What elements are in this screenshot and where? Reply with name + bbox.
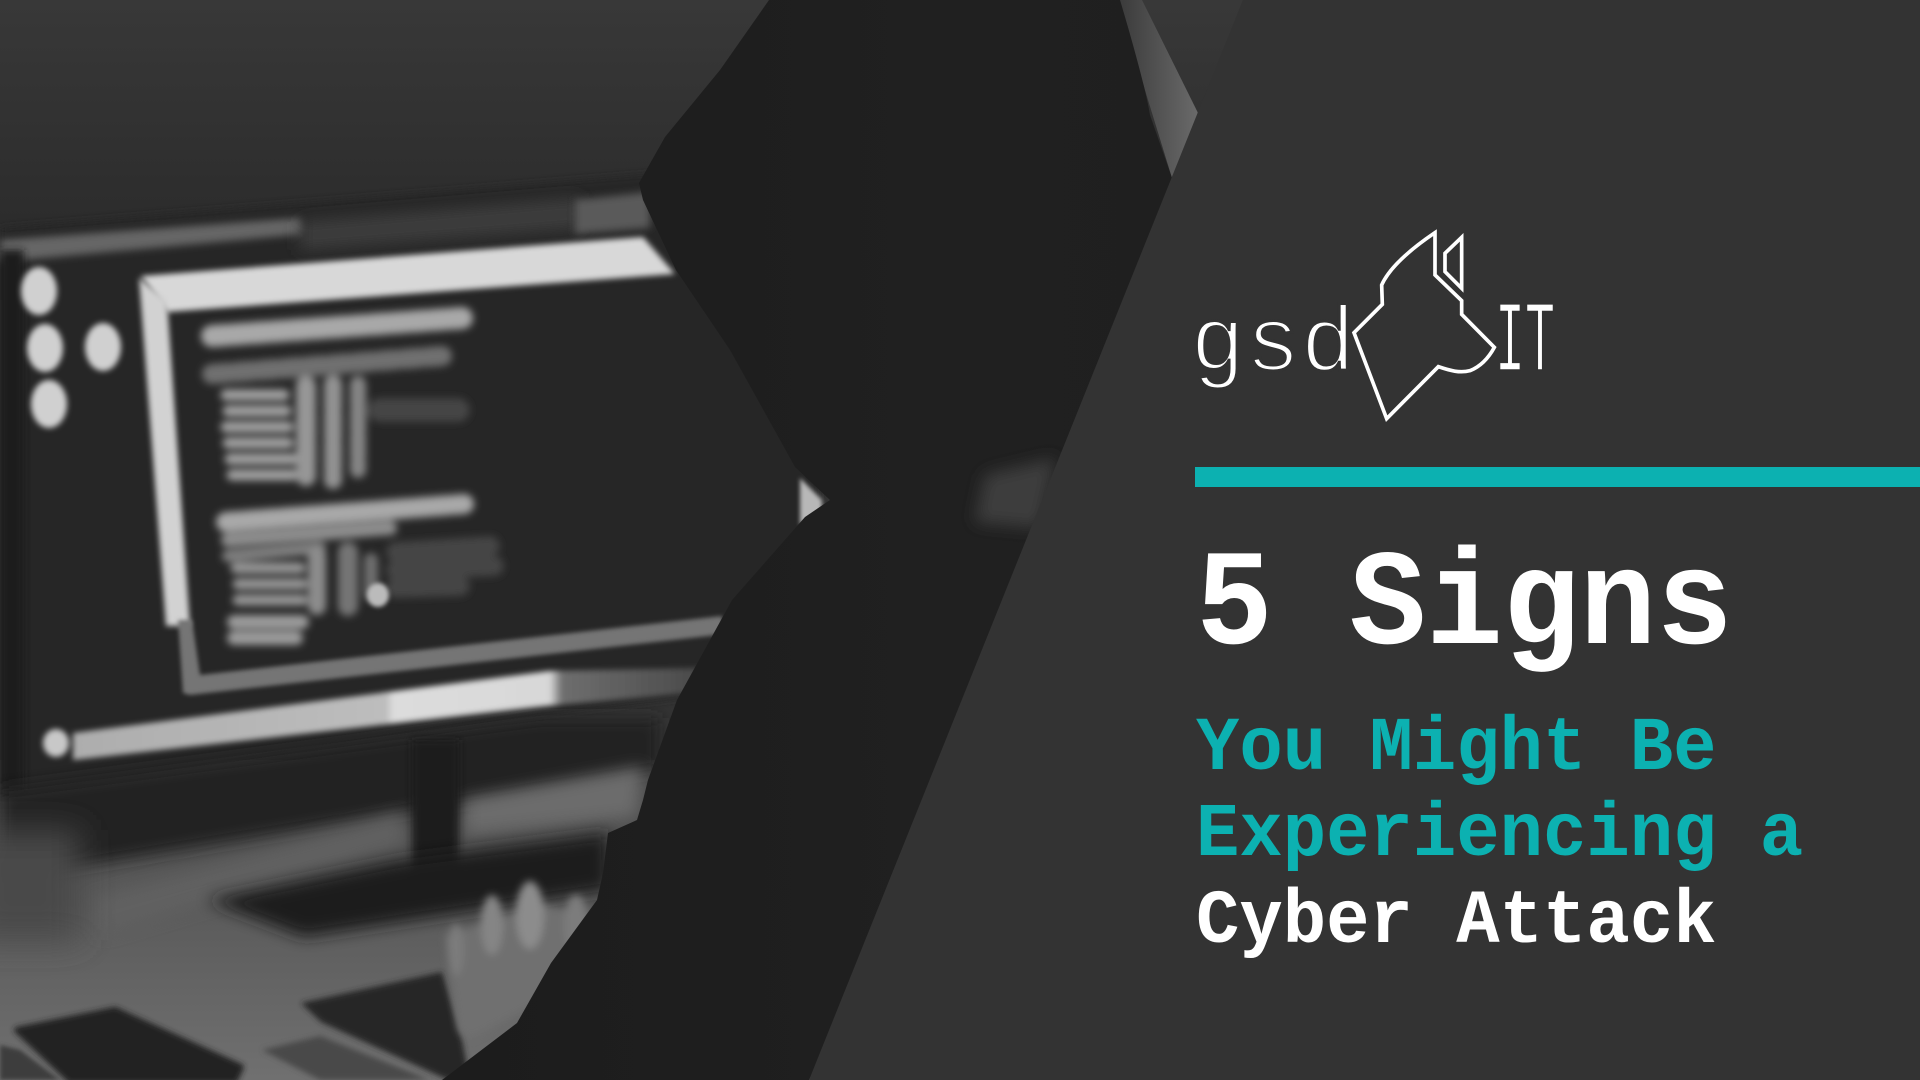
cursor dot bbox=[367, 583, 389, 607]
mouse pad bbox=[262, 1036, 430, 1080]
phone bbox=[17, 1010, 241, 1080]
teal divider bar bbox=[1195, 467, 1920, 487]
subtitle: You Might Be Experiencing a Cyber Attack bbox=[1196, 706, 1803, 966]
desk surface bbox=[0, 760, 1000, 1080]
monitor foot bbox=[207, 833, 610, 937]
bright task bar bbox=[43, 668, 700, 760]
background photo: hooded hacker at a computer bbox=[0, 0, 1300, 1080]
logo wordmark gsd: gsd bbox=[1190, 293, 1356, 398]
logo: gsd IT wolf bbox=[1190, 233, 1555, 419]
subtitle line 3: Cyber Attack bbox=[1196, 879, 1716, 966]
keyboard bbox=[301, 972, 470, 1080]
wall behind the monitor bbox=[0, 0, 1300, 300]
desk back band bbox=[90, 813, 405, 935]
person silhouette: hood and arm bbox=[442, 0, 1198, 1080]
dark diagonal panel bbox=[809, 0, 1920, 1080]
monitor lower edge and stand bbox=[0, 718, 660, 940]
hand on keyboard bbox=[445, 881, 595, 1040]
screen window frame bbox=[139, 237, 822, 695]
desktop icons bbox=[21, 267, 121, 428]
title: 5 Signs: 5 Signs bbox=[1196, 530, 1733, 684]
monitor upper bezel highlight bbox=[0, 218, 305, 262]
subtitle line 1: You Might Be bbox=[1196, 706, 1716, 793]
monitor body bbox=[0, 170, 830, 800]
logo wordmark IT: IT bbox=[1495, 287, 1555, 400]
blurred code text on screen bbox=[212, 318, 494, 638]
subtitle line 2: Experiencing a bbox=[1196, 792, 1803, 879]
hoodie cuff texture bbox=[975, 458, 1056, 528]
logo wolf head bbox=[1354, 233, 1494, 419]
